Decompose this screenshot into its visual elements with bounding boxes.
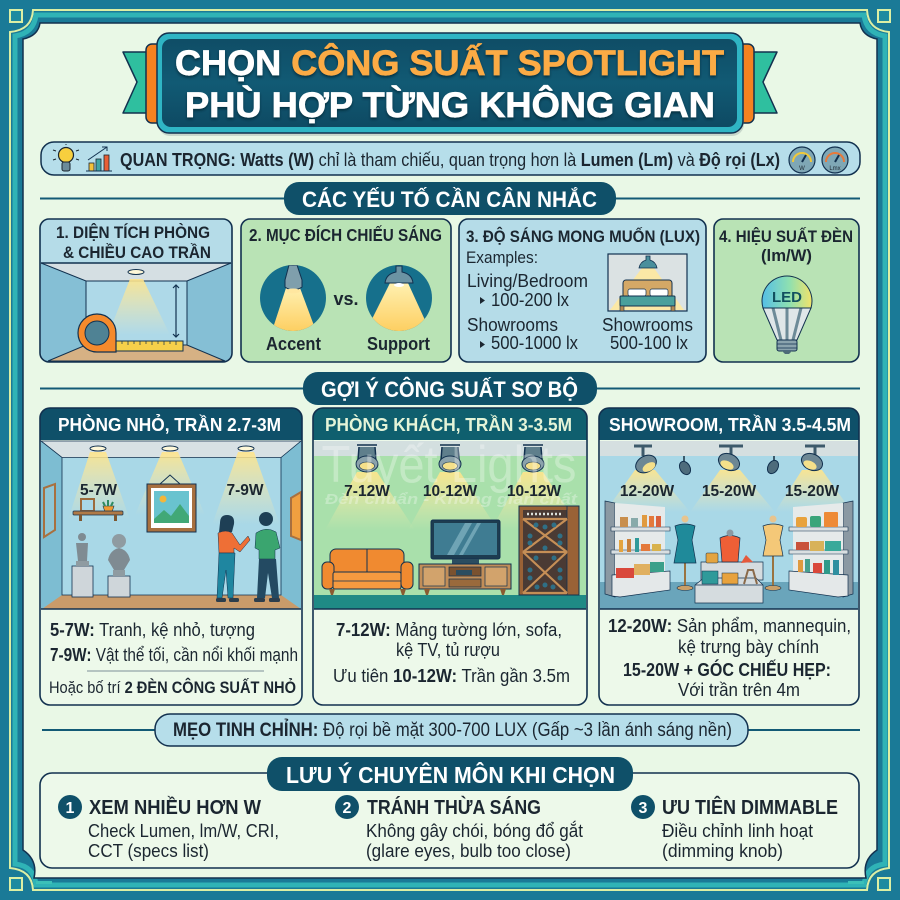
note 1: CCT (specs list) <box>88 840 209 861</box>
gallery illustration <box>41 441 301 609</box>
label 12-20W: 12-20W <box>620 483 675 500</box>
section heading: suggestions <box>40 372 860 405</box>
tip bar <box>42 714 860 746</box>
panel text: Với trần trên 4m <box>678 679 800 700</box>
panel: living room <box>313 408 587 705</box>
panel: small room <box>40 408 302 705</box>
accent lamp <box>260 265 326 331</box>
panel text: kệ TV, tủ rượu <box>396 639 500 660</box>
panel: card 4 efficiency <box>714 219 859 362</box>
heading: 4. HIỆU SUẤT ĐÈN <box>719 227 853 246</box>
panel header: PHÒNG NHỎ, TRẦN 2.7-3M <box>58 414 281 435</box>
sofa <box>322 549 413 595</box>
heading: (lm/W) <box>761 246 812 265</box>
television and console <box>419 520 511 595</box>
right shelving <box>789 501 853 597</box>
heading: 2. MỤC ĐÍCH CHIẾU SÁNG <box>249 224 442 245</box>
mannequin yellow dress <box>763 516 783 590</box>
panel text: Ưu tiên 10-12W: Trần gần 3.5m <box>333 665 570 686</box>
note 3: ƯU TIÊN DIMMABLE <box>662 795 838 819</box>
panel header <box>313 408 587 440</box>
title banner: CHỌN CÔNG SUẤT SPOTLIGHT <box>175 43 724 83</box>
label 7-9W: 7-9W <box>226 482 264 499</box>
panel text: 12-20W: Sản phẩm, mannequin, <box>608 615 851 636</box>
label 10-12W right: 10-12W <box>507 483 562 500</box>
note text: QUAN TRỌNG: Watts (W) chỉ là tham chiếu, quan trọng hơn là Lumen (Lm) và Độ rọi (Lx) <box>120 150 780 170</box>
panel: expert notes <box>40 757 859 868</box>
note 2: 2 <box>343 800 352 817</box>
left shelving <box>605 501 670 597</box>
panel text: 7-12W: Mảng tường lớn, sofa, <box>336 619 562 640</box>
lux examples: 100-200 lx <box>491 290 569 310</box>
framed painting <box>147 475 196 532</box>
panel text <box>333 619 570 686</box>
lux examples: Examples: <box>466 248 538 267</box>
panel: card 2 purpose <box>241 219 451 362</box>
lux examples: Living/Bedroom <box>467 271 588 291</box>
section heading: factors <box>40 182 860 215</box>
panel text: kệ trưng bày chính <box>678 636 819 657</box>
icon: LED bulb <box>762 276 812 354</box>
panel text: Hoặc bố trí 2 ĐÈN CÔNG SUẤT NHỎ <box>49 678 296 697</box>
living room illustration <box>314 436 586 609</box>
label 10-12W center: 10-12W <box>423 483 478 500</box>
icon: watt gauge: W <box>799 166 805 172</box>
track lamps <box>356 445 544 472</box>
picture caption: Showrooms <box>602 315 693 335</box>
panel text <box>49 619 298 697</box>
label 15-20W center: 15-20W <box>702 483 757 500</box>
bedroom picture <box>608 254 687 311</box>
panel text <box>608 615 851 700</box>
panel header: PHÒNG KHÁCH, TRẦN 3-3.5M <box>325 414 572 435</box>
section heading: suggestions: GỢI Ý CÔNG SUẤT SƠ BỘ <box>321 377 578 402</box>
icon: growth chart <box>86 147 112 171</box>
note 3: Điều chỉnh linh hoạt <box>662 820 813 841</box>
label 5-7W: 5-7W <box>80 482 117 499</box>
panel text: 7-9W: Vật thể tối, cần nổi khối mạnh <box>50 645 298 665</box>
label accent: Accent <box>266 334 321 354</box>
note 1 <box>58 795 279 861</box>
label 15-20W right: 15-20W <box>785 483 840 500</box>
statues <box>72 533 130 597</box>
mannequin teal dress <box>674 516 696 590</box>
panel header: SHOWROOM, TRẦN 3.5-4.5M <box>609 414 851 435</box>
lux examples <box>466 248 588 353</box>
panel: showroom <box>599 408 859 705</box>
panel text: 5-7W: Tranh, kệ nhỏ, tượng <box>50 619 255 640</box>
watermark: Đèn chuẩn - Không gian chất <box>325 491 578 508</box>
note 1: Check Lumen, lm/W, CRI, <box>88 820 279 841</box>
panel text: 15-20W + GÓC CHIẾU HẸP: <box>623 659 831 680</box>
icon: light bulb <box>53 144 79 171</box>
note 2: (glare eyes, bulb too close) <box>366 840 571 861</box>
heading: & CHIỀU CAO TRẦN <box>63 243 211 262</box>
side pictures <box>44 484 301 540</box>
note 3: 3 <box>639 800 648 817</box>
track spotlights <box>632 446 825 477</box>
icon: watt gauge <box>789 147 815 173</box>
heading <box>56 223 211 262</box>
watermark: Tuyết Lights <box>322 436 576 494</box>
note 3 <box>631 795 838 861</box>
note 2: Không gây chói, bóng đổ gắt <box>366 820 583 841</box>
tip bar: MẸO TINH CHỈNH: Độ rọi bề mặt 300-700 LUX (Gấp ~3 lần ánh sáng nền) <box>173 719 732 741</box>
icon: LED bulb: LED <box>772 289 802 306</box>
important note bar <box>41 142 860 175</box>
note 1: XEM NHIỀU HƠN W <box>89 796 261 819</box>
text: vs: vs. <box>333 289 359 309</box>
panel header <box>40 408 302 440</box>
title banner: PHÙ HỢP TỪNG KHÔNG GIAN <box>185 85 715 125</box>
panel: card 3 lux <box>459 219 706 362</box>
icon: lumen gauge: Lmx <box>829 166 841 172</box>
room illustration <box>41 263 231 361</box>
display table <box>695 530 763 603</box>
heading: 3. ĐỘ SÁNG MONG MUỐN (LUX) <box>466 226 700 246</box>
wine cabinet <box>519 506 579 595</box>
heading <box>719 227 853 265</box>
note 2 <box>335 795 583 861</box>
panel: card 1 room area <box>40 219 232 362</box>
note 3: (dimming knob) <box>662 840 783 861</box>
panel header <box>599 408 859 440</box>
section heading: notes: LƯU Ý CHUYÊN MÔN KHI CHỌN <box>286 761 615 788</box>
shelf <box>73 499 123 521</box>
support lamp <box>366 265 432 331</box>
icon: lumen gauge <box>822 147 848 173</box>
note 1: 1 <box>66 800 75 817</box>
section heading: factors: CÁC YẾU TỐ CẦN CÂN NHẮC <box>302 186 597 212</box>
lux examples: Showrooms <box>467 315 558 335</box>
title banner <box>123 33 777 136</box>
heading: 1. DIỆN TÍCH PHÒNG <box>56 223 210 242</box>
people <box>216 512 280 602</box>
picture caption <box>602 315 693 353</box>
icon: tape measure <box>78 314 183 352</box>
label 7-12W: 7-12W <box>344 483 390 500</box>
note 2: TRÁNH THỪA SÁNG <box>367 795 541 819</box>
label support: Support <box>367 334 430 354</box>
lux examples: 500-1000 lx <box>491 333 578 353</box>
showroom illustration <box>600 441 858 609</box>
picture caption: 500-100 lx <box>610 333 688 353</box>
